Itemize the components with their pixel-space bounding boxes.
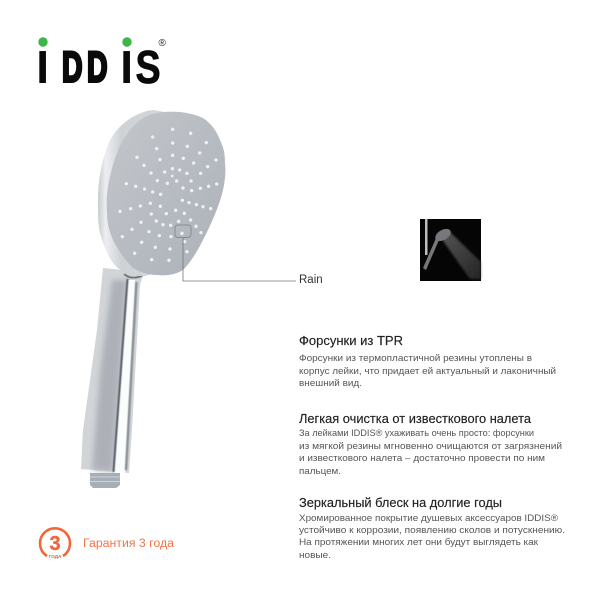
icon: 3 years: ГОДА bbox=[49, 554, 62, 559]
body: и известкового налета – достаточно провести по ним bbox=[299, 452, 545, 463]
heading: Зеркальный блеск на долгие годы bbox=[299, 496, 502, 510]
callout: Rain bbox=[175, 225, 323, 286]
logo: IDDIS: ® bbox=[158, 38, 166, 49]
body: внешний вид. bbox=[299, 377, 362, 388]
body: из мягкой резины мгновенно очищаются от загрязнений bbox=[299, 440, 562, 451]
head rim bbox=[98, 110, 175, 276]
callout: Rain: Rain bbox=[299, 274, 323, 286]
body bbox=[299, 352, 556, 388]
heading: Форсунки из TPR bbox=[299, 334, 403, 348]
text block: TPR nozzles bbox=[299, 334, 556, 388]
handle bbox=[81, 268, 144, 473]
body: корпус лейки, что придает ей актуальный и лаконичный bbox=[299, 365, 556, 376]
icon: 3 years bbox=[40, 528, 70, 559]
body: пальцем. bbox=[299, 465, 341, 476]
shower head product image bbox=[81, 110, 225, 488]
body bbox=[299, 427, 562, 476]
warranty label: Гарантия 3 года bbox=[83, 538, 175, 550]
body bbox=[299, 512, 565, 560]
body: За лейками IDDIS® ухаживать очень просто: форсунки bbox=[299, 427, 534, 438]
head face bbox=[107, 112, 225, 275]
warranty badge bbox=[40, 528, 175, 559]
logo: IDDIS: I bbox=[36, 41, 49, 93]
text block: mirror shine bbox=[299, 496, 565, 560]
body: Хромированное покрытие душевых аксессуаров IDDIS® bbox=[299, 512, 558, 523]
thumbnail: shower photo bbox=[420, 219, 481, 281]
body: На протяжении многих лет они будут выглядеть как bbox=[299, 536, 539, 547]
text block: easy cleaning bbox=[299, 412, 562, 476]
body: новые. bbox=[299, 549, 331, 560]
logo: IDDIS: S bbox=[136, 41, 161, 93]
body: устойчиво к коррозии, появлению сколов и потускнению. bbox=[299, 524, 565, 535]
logo: IDDIS bbox=[36, 37, 167, 93]
logo: IDDIS: D bbox=[87, 43, 107, 91]
threaded connector bbox=[90, 473, 120, 488]
logo: IDDIS: D bbox=[62, 43, 82, 91]
heading: Легкая очистка от известкового налета bbox=[299, 412, 531, 426]
icon: 3 years: 3 bbox=[49, 533, 61, 555]
body: Форсунки из термопластичной резины утоплены в bbox=[299, 352, 532, 363]
nozzles bbox=[118, 128, 218, 262]
logo: IDDIS: I bbox=[120, 41, 133, 93]
